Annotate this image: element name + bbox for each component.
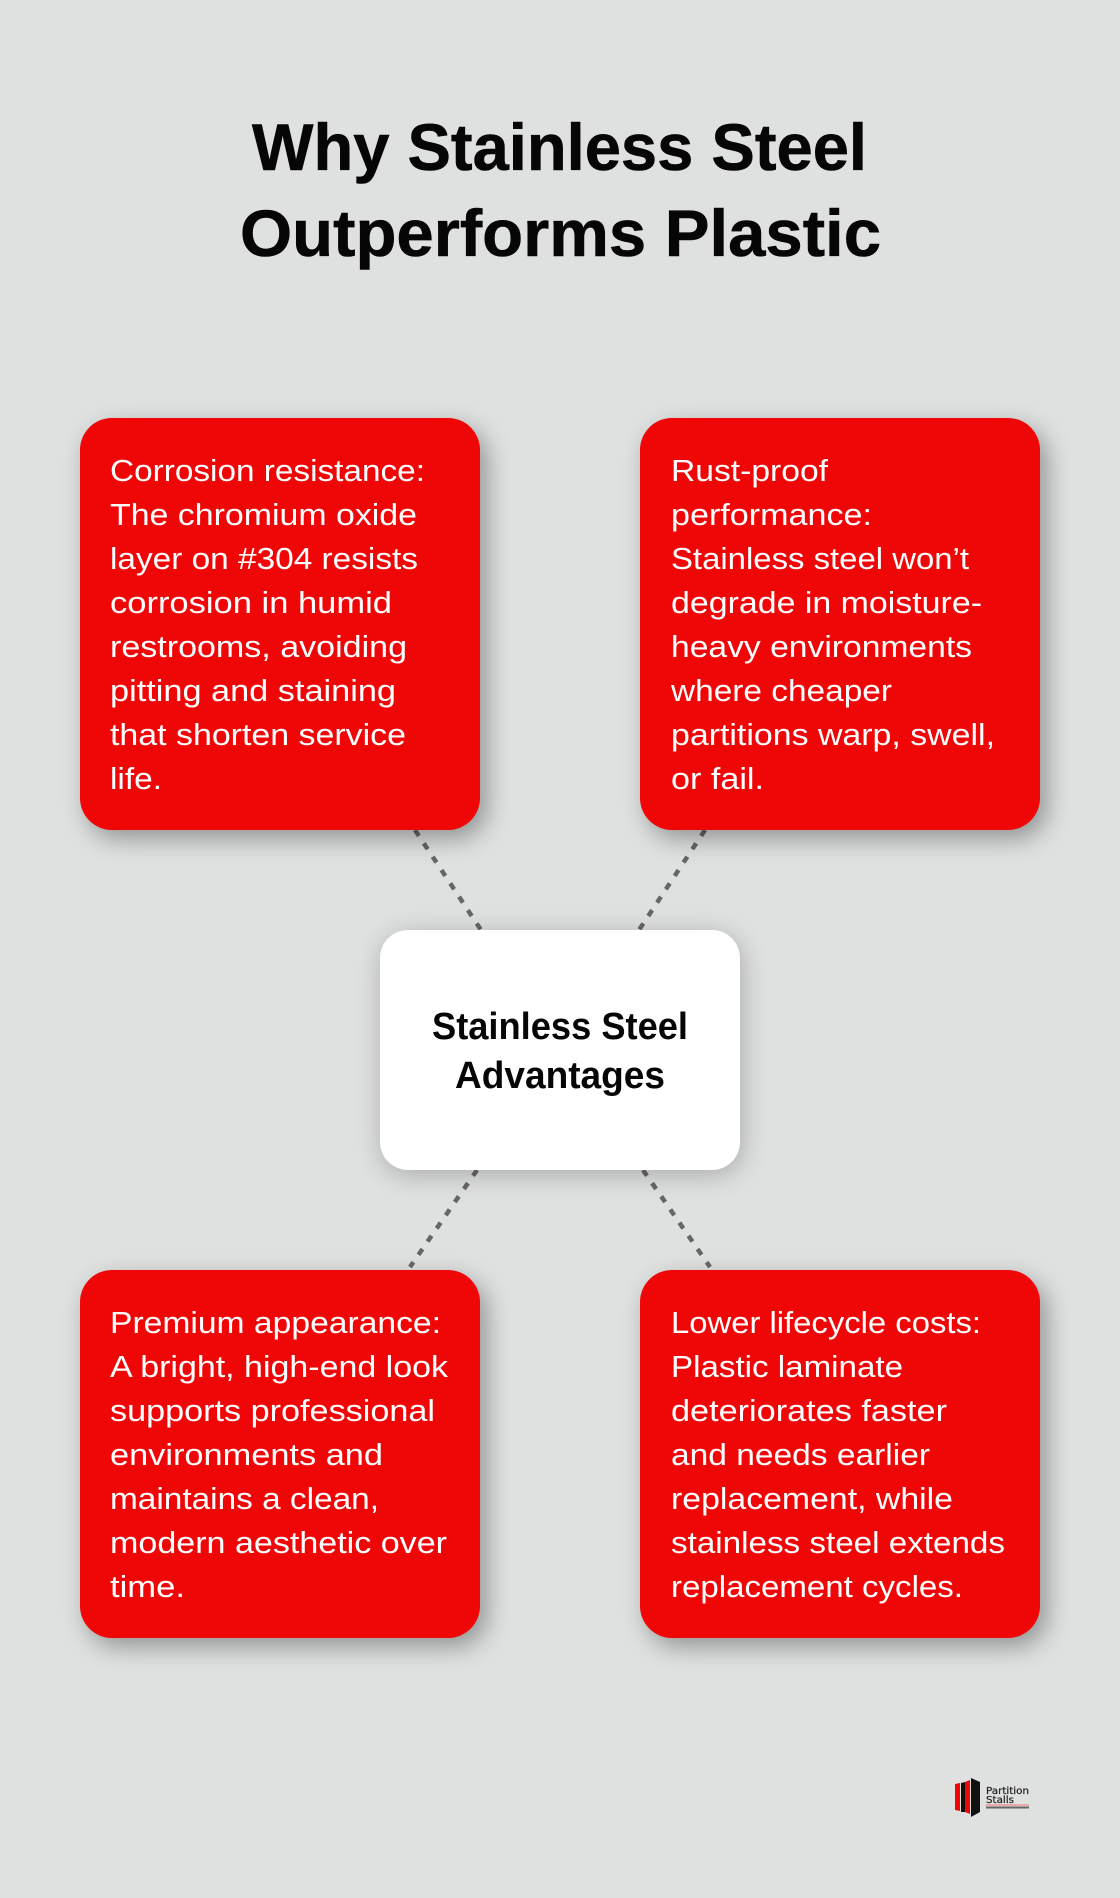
text: lower lifecycle costs: deteriorates faster <box>671 1393 947 1428</box>
text: corrosion resistance: restrooms, avoiding <box>110 629 407 664</box>
panel: corrosion resistance <box>80 418 480 830</box>
text: center node: Advantages <box>455 1055 665 1097</box>
text: rust-proof performance: degrade in moisture- <box>671 585 982 620</box>
text: rust-proof performance: Stainless steel won’t <box>671 541 969 576</box>
text: lower lifecycle costs: stainless steel extends <box>671 1525 1005 1560</box>
text: rust-proof performance: or fail. <box>671 761 764 796</box>
text: premium appearance: A bright, high-end look <box>110 1349 449 1384</box>
text: lower lifecycle costs: and needs earlier <box>671 1437 930 1472</box>
title: Outperforms Plastic <box>240 196 881 270</box>
panel: center node <box>380 930 740 1170</box>
text: premium appearance: supports professional <box>110 1393 435 1428</box>
title: Why Stainless Steel <box>252 110 867 184</box>
text: corrosion resistance: that shorten service <box>110 717 406 752</box>
text: rust-proof performance <box>670 453 995 796</box>
text: center node <box>432 1006 688 1097</box>
text: premium appearance: modern aesthetic over <box>110 1525 447 1560</box>
text: lower lifecycle costs: replacement, while <box>671 1481 953 1516</box>
logo: Partition Stalls: Stalls <box>986 1795 1014 1806</box>
text: lower lifecycle costs <box>671 1305 1005 1604</box>
text: premium appearance: environments and <box>110 1437 383 1472</box>
text: rust-proof performance: performance: <box>671 497 872 532</box>
text: premium appearance: Premium appearance: <box>110 1305 441 1340</box>
text: lower lifecycle costs: Plastic laminate <box>671 1349 903 1384</box>
text: corrosion resistance: The chromium oxide <box>110 497 417 532</box>
text: lower lifecycle costs: Lower lifecycle costs: <box>671 1305 981 1340</box>
text: rust-proof performance: where cheaper <box>670 673 892 708</box>
text: rust-proof performance: heavy environments <box>671 629 972 664</box>
panel: premium appearance <box>80 1270 480 1638</box>
text: premium appearance: time. <box>110 1569 185 1604</box>
text: corrosion resistance: Corrosion resistance: <box>110 453 425 488</box>
text: lower lifecycle costs: replacement cycles. <box>671 1569 963 1604</box>
text: premium appearance: maintains a clean, <box>110 1481 379 1516</box>
text: rust-proof performance: partitions warp, swell, <box>671 717 995 752</box>
text: corrosion resistance <box>110 453 425 796</box>
text: rust-proof performance: Rust-proof <box>671 453 828 488</box>
text: premium appearance <box>110 1305 449 1604</box>
text: center node: Stainless Steel <box>432 1006 688 1048</box>
panel: rust-proof performance <box>640 418 1040 830</box>
panel: lower lifecycle costs <box>640 1270 1040 1638</box>
title <box>240 110 881 270</box>
text: corrosion resistance: corrosion in humid <box>110 585 392 620</box>
text: corrosion resistance: life. <box>110 761 162 796</box>
logo: Partition Stalls: Partition <box>986 1786 1029 1797</box>
text: corrosion resistance: layer on #304 resists <box>110 541 418 576</box>
logo: Partition Stalls <box>955 1778 1029 1817</box>
text: corrosion resistance: pitting and staining <box>110 673 396 708</box>
